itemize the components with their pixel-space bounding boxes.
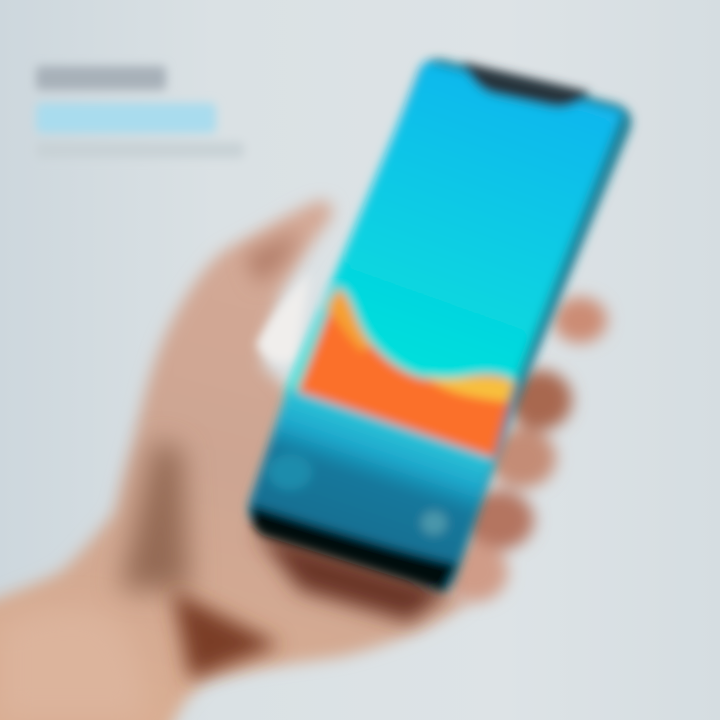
finger 3 [488, 428, 556, 488]
hand shading: palm crease [120, 440, 190, 590]
finger 5 [440, 542, 508, 602]
screen [284, 62, 622, 396]
hand shading: thumb [245, 230, 300, 285]
fingers behind phone [440, 297, 607, 602]
hand shading: deep fold [172, 590, 280, 680]
lower panel [248, 388, 494, 586]
notch [462, 62, 590, 107]
hand: palm and wrist [0, 201, 470, 720]
chart wave: amber left edge [326, 288, 372, 352]
caption line: grey [36, 142, 244, 158]
panel: blurred content block [268, 454, 312, 490]
finger 4 [462, 490, 534, 550]
panel: small button [421, 511, 447, 535]
heading line: cyan [36, 103, 216, 133]
chart wave: orange [294, 288, 514, 462]
phone body [249, 59, 632, 591]
hand highlight: wrist [0, 608, 145, 720]
panel: dark bottom edge [251, 505, 458, 592]
phone [248, 59, 632, 592]
heading line: dark [36, 66, 166, 90]
hand shading: under phone [255, 530, 450, 622]
chart wave: yellow accent [425, 376, 514, 402]
blurred heading block [36, 66, 244, 158]
finger 1 [553, 297, 607, 343]
finger 2 [508, 370, 572, 430]
hand highlight: gap between thumb and phone [256, 272, 310, 363]
